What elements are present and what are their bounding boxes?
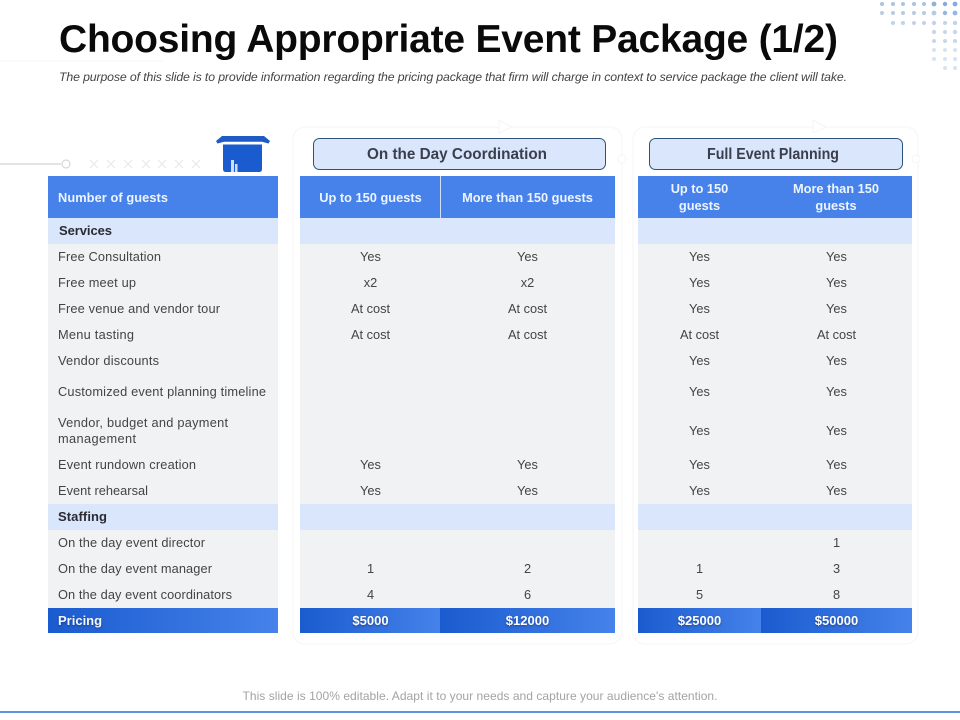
values: up to 150 guests: At cost bbox=[351, 301, 390, 316]
icon: box bbox=[216, 136, 270, 172]
heading pill: Full Event Planning: Full Event Planning bbox=[707, 146, 839, 163]
values: more than 150 guests: Yes bbox=[826, 423, 847, 438]
column headers: More than 150 guests bbox=[462, 190, 593, 205]
subtitle: The purpose of this slide is to provide information regarding the pricing package that firm will charge in context to service package the client will take. bbox=[59, 70, 847, 84]
values: more than 150 guests: At cost bbox=[508, 327, 547, 342]
values: more than 150 guests: 6 bbox=[524, 587, 531, 602]
column headers bbox=[638, 176, 912, 218]
title: Choosing Appropriate Event Package (1/2) bbox=[59, 18, 838, 61]
service labels bbox=[58, 249, 266, 498]
values: up to 150 guests: Yes bbox=[689, 353, 710, 368]
values: more than 150 guests bbox=[817, 249, 856, 602]
price: $5000: $5000 bbox=[352, 613, 389, 628]
values: more than 150 guests: Yes bbox=[826, 457, 847, 472]
pricing label bbox=[48, 608, 278, 633]
footer line bbox=[0, 711, 960, 713]
service labels: Free venue and vendor tour bbox=[58, 301, 221, 316]
section: staffing bbox=[48, 504, 278, 530]
values: up to 150 guests: 5 bbox=[696, 587, 703, 602]
values: up to 150 guests: Yes bbox=[689, 275, 710, 290]
values: more than 150 guests: At cost bbox=[508, 301, 547, 316]
panel: full event planning outline bbox=[633, 120, 920, 644]
section: services: Services bbox=[59, 223, 112, 238]
values: up to 150 guests: Yes bbox=[360, 483, 381, 498]
price: $50000 bbox=[761, 608, 912, 633]
header: number of guests: Number of guests bbox=[58, 190, 168, 205]
service labels: Customized event planning timeline bbox=[58, 384, 266, 399]
service labels: Event rundown creation bbox=[58, 457, 196, 472]
values: more than 150 guests: Yes bbox=[826, 384, 847, 399]
staffing labels bbox=[58, 535, 232, 602]
connector with circle and crosses bbox=[0, 160, 200, 168]
panel: on the day coordination outline bbox=[293, 120, 626, 644]
values: up to 150 guests: Yes bbox=[689, 301, 710, 316]
values: up to 150 guests bbox=[680, 249, 719, 602]
price: $12000 bbox=[440, 608, 615, 633]
values: up to 150 guests: Yes bbox=[689, 384, 710, 399]
price: $5000 bbox=[300, 608, 440, 633]
column headers: More than 150 bbox=[793, 181, 879, 196]
staffing labels: On the day event manager bbox=[58, 561, 213, 576]
heading pill: Full Event Planning bbox=[650, 138, 902, 170]
table column: full event planning bbox=[638, 176, 912, 633]
values: up to 150 guests: Yes bbox=[689, 249, 710, 264]
table column: row labels bbox=[48, 176, 278, 633]
column headers bbox=[300, 176, 615, 218]
values: more than 150 guests: Yes bbox=[826, 249, 847, 264]
service labels: Menu tasting bbox=[58, 327, 134, 342]
price: $12000: $12000 bbox=[506, 613, 549, 628]
values: more than 150 guests: 2 bbox=[524, 561, 531, 576]
price: $25000 bbox=[638, 608, 761, 633]
values: up to 150 guests: Yes bbox=[360, 457, 381, 472]
values: up to 150 guests: x2 bbox=[364, 275, 377, 290]
values: more than 150 guests: At cost bbox=[817, 327, 856, 342]
heading pill: On the Day Coordination: On the Day Coordination bbox=[367, 146, 547, 163]
values: more than 150 guests: 3 bbox=[833, 561, 840, 576]
values: up to 150 guests: Yes bbox=[689, 483, 710, 498]
values: more than 150 guests: Yes bbox=[517, 249, 538, 264]
values: up to 150 guests: 1 bbox=[367, 561, 374, 576]
price: $25000: $25000 bbox=[678, 613, 721, 628]
table column: on the day coordination bbox=[300, 176, 615, 633]
column headers: guests bbox=[815, 198, 857, 213]
price: $50000: $50000 bbox=[815, 613, 858, 628]
column headers: guests bbox=[679, 198, 720, 213]
values: more than 150 guests bbox=[508, 249, 547, 602]
values: more than 150 guests: 1 bbox=[833, 535, 840, 550]
values: up to 150 guests bbox=[351, 249, 390, 602]
footer note: This slide is 100% editable. Adapt it to your needs and capture your audience's attention. bbox=[242, 689, 718, 703]
decorative dots top right bbox=[880, 2, 957, 70]
values: up to 150 guests: At cost bbox=[680, 327, 719, 342]
service labels: Free meet up bbox=[58, 275, 136, 290]
values: up to 150 guests: 4 bbox=[367, 587, 374, 602]
service labels: Vendor, budget and payment bbox=[58, 415, 228, 430]
values: more than 150 guests: Yes bbox=[517, 457, 538, 472]
values: up to 150 guests: Yes bbox=[360, 249, 381, 264]
values: up to 150 guests: 1 bbox=[696, 561, 703, 576]
service labels: Vendor discounts bbox=[58, 353, 159, 368]
values: more than 150 guests: Yes bbox=[826, 301, 847, 316]
header: number of guests bbox=[48, 176, 278, 218]
values: up to 150 guests: Yes bbox=[689, 457, 710, 472]
values: up to 150 guests: Yes bbox=[689, 423, 710, 438]
staffing labels: On the day event director bbox=[58, 535, 206, 550]
staffing labels: On the day event coordinators bbox=[58, 587, 232, 602]
service labels: Event rehearsal bbox=[58, 483, 148, 498]
values: more than 150 guests: 8 bbox=[833, 587, 840, 602]
service labels: management bbox=[58, 431, 136, 446]
heading pill: On the Day Coordination bbox=[314, 138, 606, 170]
values: more than 150 guests: Yes bbox=[826, 353, 847, 368]
values: more than 150 guests: Yes bbox=[826, 275, 847, 290]
section: staffing: Staffing bbox=[58, 509, 107, 524]
values: more than 150 guests: x2 bbox=[521, 275, 534, 290]
service labels: Free Consultation bbox=[58, 249, 161, 264]
section: services bbox=[48, 218, 278, 244]
values: up to 150 guests: At cost bbox=[351, 327, 390, 342]
column headers: Up to 150 guests bbox=[319, 190, 422, 205]
values: more than 150 guests: Yes bbox=[517, 483, 538, 498]
column headers: Up to 150 bbox=[671, 181, 728, 196]
values: more than 150 guests: Yes bbox=[826, 483, 847, 498]
pricing label: Pricing bbox=[58, 613, 102, 628]
